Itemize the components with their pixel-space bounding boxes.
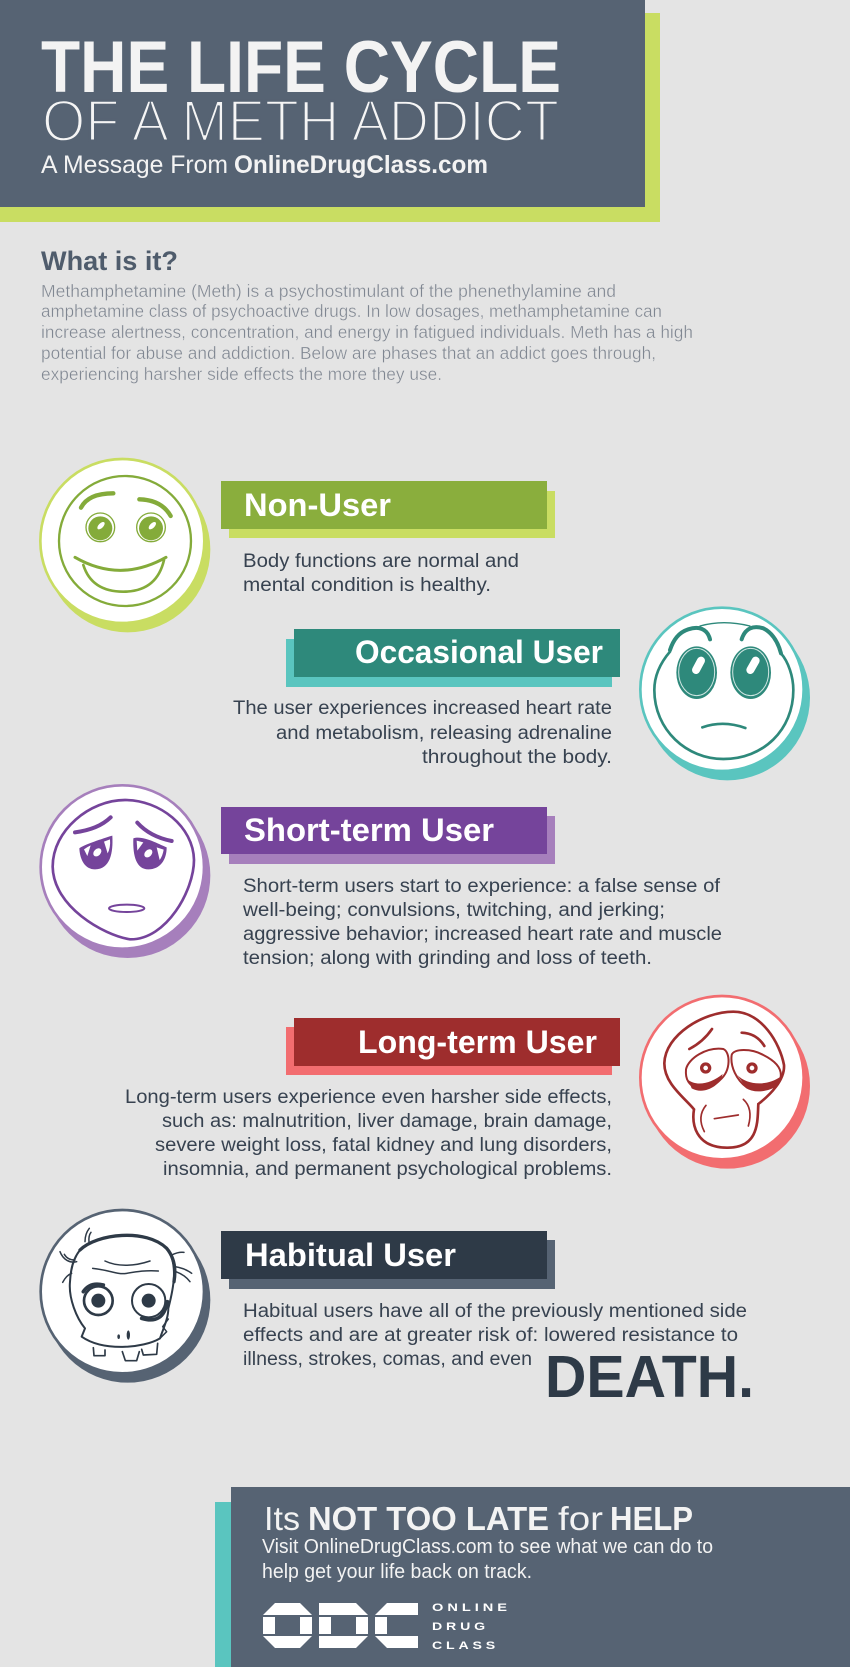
banner: short-term user: Short-term User xyxy=(244,812,494,848)
long-term user text: severe weight loss, fatal kidney and lung disorders, xyxy=(155,1135,612,1156)
banner: habitual user: Habitual User xyxy=(245,1237,456,1273)
death callout: DEATH. xyxy=(545,1344,754,1410)
footer heading: HELP xyxy=(610,1500,693,1537)
long-term user text: such as: malnutrition, liver damage, brain damage, xyxy=(162,1111,612,1132)
occasional user text xyxy=(233,698,612,768)
banner: non-user xyxy=(221,481,555,538)
short-term user text: tension; along with grinding and loss of teeth. xyxy=(243,948,652,969)
intro text xyxy=(41,281,693,384)
icon: non-user happy face xyxy=(40,459,210,632)
icon: habitual user skull face xyxy=(41,1210,210,1383)
banner: long-term user: Long-term User xyxy=(358,1024,597,1060)
footer text xyxy=(262,1536,713,1583)
intro text: potential for abuse and addiction. Below are phases that an addict goes through, xyxy=(41,343,656,363)
footer panel xyxy=(215,1487,850,1667)
footer heading: for xyxy=(558,1500,603,1537)
subtitle xyxy=(41,151,488,179)
short-term user text xyxy=(242,876,722,969)
header panel xyxy=(0,0,660,222)
title: OF A METH ADDICT xyxy=(42,89,559,154)
habitual user text: Habitual users have all of the previously mentioned side xyxy=(243,1301,747,1322)
habitual user text xyxy=(243,1301,747,1370)
short-term user text: well-being; convulsions, twitching, and jerking; xyxy=(242,900,665,921)
banner: non-user: Non-User xyxy=(244,487,391,523)
habitual user text: effects and are at greater risk of: lowered resistance to xyxy=(243,1325,738,1346)
logo: ODC xyxy=(263,1602,511,1652)
intro: what is it xyxy=(41,246,693,384)
title: THE LIFE CYCLE xyxy=(41,27,561,108)
icon: long-term user face xyxy=(640,996,810,1169)
logo: ODC: ONLINE xyxy=(432,1602,511,1614)
short-term user text: Short-term users start to experience: a false sense of xyxy=(243,876,721,897)
footer text: help get your life back on track. xyxy=(262,1561,532,1583)
banner: occasional user xyxy=(286,629,620,687)
non-user text: mental condition is healthy. xyxy=(243,575,491,596)
occasional user text: throughout the body. xyxy=(422,747,612,768)
short-term user text: aggressive behavior; increased heart rate and muscle xyxy=(243,924,722,945)
icon: short-term user face xyxy=(41,785,210,958)
intro text: amphetamine class of psychoactive drugs. In low dosages, methamphetamine can xyxy=(41,301,662,321)
banner: short-term user xyxy=(221,807,555,864)
footer heading xyxy=(264,1500,693,1537)
occasional user text: and metabolism, releasing adrenaline xyxy=(276,723,612,744)
banner: habitual user xyxy=(221,1231,555,1289)
section: occasional user xyxy=(233,629,620,768)
intro heading: What is it? xyxy=(41,246,178,276)
non-user text xyxy=(243,551,519,596)
long-term user text xyxy=(125,1087,612,1180)
logo: ODC: DRUG xyxy=(432,1621,489,1633)
section: long-term user xyxy=(125,1018,620,1180)
habitual user text: illness, strokes, comas, and even xyxy=(243,1349,532,1370)
long-term user text: insomnia, and permanent psychological problems. xyxy=(163,1159,612,1180)
occasional user text: The user experiences increased heart rate xyxy=(233,698,612,719)
long-term user text: Long-term users experience even harsher side effects, xyxy=(125,1087,612,1108)
section: habitual user xyxy=(221,1231,754,1410)
subtitle: OnlineDrugClass.com xyxy=(234,151,488,179)
footer heading: NOT TOO LATE xyxy=(308,1500,549,1537)
banner: long-term user xyxy=(286,1018,620,1075)
banner: occasional user: Occasional User xyxy=(355,634,603,670)
section: short-term user xyxy=(221,807,722,969)
icon: occasional user face xyxy=(640,608,810,780)
intro text: Methamphetamine (Meth) is a psychostimulant of the phenethylamine and xyxy=(41,281,616,301)
footer text: Visit OnlineDrugClass.com to see what we can do to xyxy=(262,1536,713,1558)
non-user text: Body functions are normal and xyxy=(243,551,519,572)
intro text: increase alertness, concentration, and energy in fatigued individuals. Meth has a high xyxy=(41,322,693,342)
subtitle: A Message From xyxy=(41,151,228,179)
logo: ODC: CLASS xyxy=(432,1640,499,1652)
intro text: experiencing harsher side effects the more they use. xyxy=(41,364,442,384)
footer heading: Its xyxy=(264,1500,300,1537)
section: non-user xyxy=(221,481,555,596)
title xyxy=(41,27,561,154)
